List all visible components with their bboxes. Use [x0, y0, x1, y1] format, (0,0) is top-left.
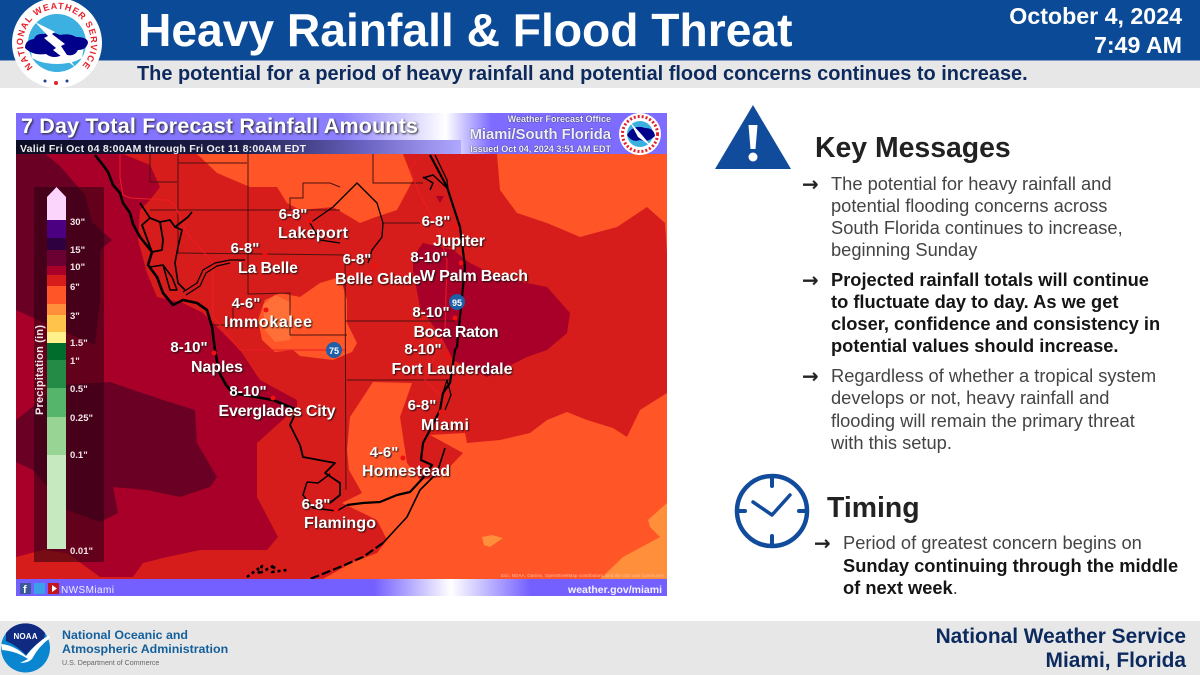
map footer bar: weather.gov/miami: [567, 584, 662, 596]
icon: small NWS logo: [619, 113, 661, 155]
text block: key message 1: potential flooding concerns across: [831, 195, 1107, 216]
city rainfall labels: W Palm Beach: [420, 268, 528, 285]
city rainfall labels: 6-8": [343, 251, 371, 268]
text block: key message 2: closer, confidence and consistency in: [831, 313, 1160, 334]
map title bar: [16, 113, 667, 155]
legend: 30": [70, 217, 85, 228]
map footer bar: NWSMiami: [61, 585, 114, 596]
city rainfall labels: 8-10": [404, 341, 442, 358]
text block: key message 3: develops or not, heavy rainfall and: [831, 387, 1109, 408]
subtitle: The potential for a period of heavy rainfall and potential flood concerns continues to increase.: [137, 63, 1028, 85]
date and time: October 4, 2024: [1009, 3, 1182, 29]
city rainfall labels: 8-10": [229, 383, 267, 400]
map footer bar: Esri, NOAA, Garmin, OpenStreetMap contributors, and the GIS user community: [501, 573, 665, 578]
city rainfall labels: Fort Lauderdale: [392, 361, 513, 378]
text block: key message 3: [802, 364, 1156, 453]
legend: 0.5": [70, 384, 88, 395]
heading: timing: Timing: [827, 492, 920, 524]
city rainfall labels: 6-8": [279, 206, 307, 223]
legend: 0.01": [70, 546, 93, 557]
city rainfall labels: Immokalee: [224, 314, 312, 331]
roads: [120, 154, 447, 395]
map footer bar: [16, 573, 667, 596]
text block: key message 2: →: [802, 268, 819, 292]
highway shields: 95: [452, 298, 462, 308]
text block: key message 1: →: [802, 172, 819, 196]
header band: [0, 0, 1200, 60]
text block: timing details: [814, 531, 1178, 598]
footer band: [0, 621, 1200, 675]
text block: key message 3: →: [802, 364, 819, 388]
date and time: 7:49 AM: [1094, 32, 1182, 58]
legend: 1.5": [70, 338, 88, 349]
text block: timing details: →: [814, 531, 831, 555]
city rainfall labels: 6-8": [422, 213, 450, 230]
legend: Precipitation (in): [34, 325, 46, 415]
text block: key message 3: with this setup.: [831, 432, 952, 453]
text block: key message 2: to fluctuate day to day. As we get: [831, 291, 1118, 312]
title: Heavy Rainfall & Flood Threat: [138, 4, 792, 56]
text block: key message 3: Regardless of whether a tropical system: [831, 365, 1156, 386]
city rainfall labels: Miami: [421, 417, 469, 434]
coastline: [95, 155, 465, 579]
text block: timing details: of next week.: [843, 577, 958, 598]
text block: NWS Miami: [936, 625, 1186, 672]
text block: NOAA name: National Oceanic and: [62, 628, 188, 642]
rainfall shading: [16, 154, 667, 579]
text block: key message 1: [802, 172, 1123, 260]
text block: timing details: Period of greatest concern begins on: [843, 532, 1142, 553]
subtitle band: [0, 60, 1200, 88]
map title bar: Weather Forecast Office: [508, 114, 611, 124]
city rainfall labels: 6-8": [231, 240, 259, 257]
highway shields: [326, 294, 465, 358]
legend: 6": [70, 282, 80, 293]
map title bar: Valid Fri Oct 04 8:00AM through Fri Oct 11 8:00AM EDT: [20, 143, 307, 155]
text block: timing details: Sunday continuing through the middle: [843, 554, 1178, 576]
map title bar: Issued Oct 04, 2024 3:51 AM EDT: [470, 144, 611, 154]
text block: key message 1: South Florida continues to increase,: [831, 217, 1123, 238]
city rainfall labels: Belle Glade: [335, 271, 421, 288]
text block: key message 1: The potential for heavy rainfall and: [831, 173, 1112, 194]
icon: NOAA logo: [1, 623, 50, 672]
city rainfall labels: Everglades City: [218, 403, 336, 420]
legend: 0.1": [70, 450, 88, 461]
city rainfall labels: 4-6": [370, 444, 398, 461]
text block: NWS Miami: Miami, Florida: [1046, 649, 1186, 672]
text block: key message 1: beginning Sunday: [831, 239, 977, 260]
legend: 3": [70, 311, 80, 322]
text block: NOAA name: [62, 628, 228, 667]
text block: key message 3: flooding will remain the primary threat: [831, 410, 1135, 431]
text block: NWS Miami: National Weather Service: [936, 625, 1186, 648]
highway shields: 75: [329, 346, 339, 356]
panel: rainfall forecast map: [16, 113, 667, 596]
legend: 10": [70, 262, 85, 273]
heading: key messages: Key Messages: [815, 132, 1011, 164]
icon: National Weather Service logo: NATIONAL WEATHER SERVICE: [16, 2, 98, 71]
city rainfall labels: Naples: [191, 359, 243, 376]
legend: [34, 187, 104, 562]
city rainfall labels: 8-10": [170, 339, 208, 356]
icon: NOAA logo: NOAA: [14, 632, 38, 641]
city rainfall labels: 8-10": [412, 304, 450, 321]
city rainfall labels: La Belle: [238, 260, 298, 277]
county lines: [150, 154, 455, 490]
legend: 0.25": [70, 413, 93, 424]
text block: NOAA name: Atmospheric Administration: [62, 642, 228, 656]
city rainfall labels: 6-8": [408, 397, 436, 414]
city rainfall labels: 6-8": [302, 496, 330, 513]
city markers: [212, 218, 464, 512]
city rainfall labels: Homestead: [362, 463, 450, 480]
city rainfall labels: Flamingo: [304, 515, 376, 532]
city rainfall labels: Jupiter: [433, 233, 485, 250]
map title bar: Miami/South Florida: [470, 127, 612, 143]
text block: key message 2: [802, 268, 1160, 356]
city rainfall labels: Boca Raton: [414, 324, 498, 341]
city rainfall labels: 8-10": [410, 249, 448, 266]
text block: key message 2: potential values should increase.: [831, 335, 1119, 356]
icon: warning triangle: [715, 105, 791, 169]
legend: 15": [70, 245, 85, 256]
legend: 1": [70, 356, 80, 367]
city rainfall labels: Lakeport: [278, 225, 349, 242]
map title bar: 7 Day Total Forecast Rainfall Amounts: [21, 114, 418, 138]
text block: key message 2: Projected rainfall totals will continue: [831, 269, 1149, 290]
date and time: [1009, 3, 1182, 58]
city rainfall labels: [170, 206, 528, 532]
city rainfall labels: 4-6": [232, 295, 260, 312]
map footer bar: f: [23, 584, 27, 596]
icon: clock: [734, 474, 810, 548]
text block: NOAA name: U.S. Department of Commerce: [62, 659, 159, 667]
